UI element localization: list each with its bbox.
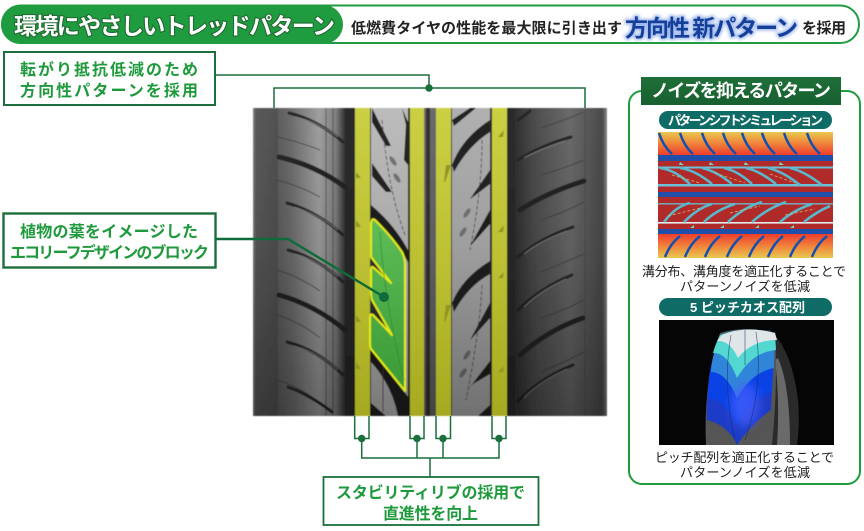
connector: leaf <box>216 239 388 301</box>
stability ribs <box>355 108 507 416</box>
left shoulder <box>253 108 345 416</box>
tire tread <box>253 108 607 416</box>
centre block grooves right <box>452 108 490 416</box>
callout: stability rib: スタビリティリブの採用で <box>336 483 525 502</box>
header subtitle: 低燃費タイヤの性能を最大限に引き出す <box>351 19 622 37</box>
caption: simulation <box>642 264 846 294</box>
panel title <box>641 77 841 105</box>
callout: eco leaf: エコリーフデザインのブロック <box>10 243 209 262</box>
callout: stability rib: 直進性を向上 <box>383 504 478 523</box>
callout: eco leaf <box>4 214 216 268</box>
panel: noise reduction <box>629 77 860 484</box>
vertical shading <box>253 108 607 416</box>
callout: rolling resistance <box>4 52 215 105</box>
header subtitle <box>351 15 846 41</box>
caption: pitch chaos: ピッチ配列を適正化することで <box>655 450 834 465</box>
connector: directional pattern <box>215 75 585 108</box>
tire visualisation <box>659 320 834 445</box>
centre base <box>345 108 515 416</box>
callout: stability rib <box>324 477 538 525</box>
connector: ribs <box>355 416 506 477</box>
callout: rolling resistance: 転がり抵抗低減のため <box>20 60 198 79</box>
shoulder slots right <box>518 111 584 401</box>
pill: 5 pitch chaos: 5 ピッチカオス配列 <box>690 300 805 315</box>
panel title: ノイズを抑えるパターン <box>651 80 831 101</box>
header subtitle: 方向性 新パターン <box>625 15 798 41</box>
pill: pattern shift simulation: パターンシフトシミュレーション <box>668 113 823 128</box>
shoulder slots left <box>279 113 345 412</box>
eco leaf block <box>370 219 405 391</box>
header subtitle: を採用 <box>802 20 846 37</box>
caption: pitch chaos <box>655 450 834 480</box>
header subtitle: 方向性 新パターン <box>625 15 798 41</box>
callout: eco leaf: 植物の葉をイメージした <box>20 222 198 241</box>
colour bands <box>707 329 775 445</box>
simulation chart <box>658 132 833 258</box>
caption: simulation: パターンノイズを低減 <box>680 279 810 294</box>
pill: 5 pitch chaos <box>659 298 832 316</box>
centre block grooves left <box>371 108 409 416</box>
callout: rolling resistance: 方向性パターンを採用 <box>20 81 198 100</box>
header title pill: 環境にやさしいトレッドパターン <box>14 13 335 39</box>
right shoulder <box>515 108 607 416</box>
shoulder lines <box>277 108 585 416</box>
caption: pitch chaos: パターンノイズを低減 <box>680 465 810 480</box>
caption: simulation: 溝分布、溝角度を適正化することで <box>642 264 846 279</box>
centre blocks <box>371 108 408 416</box>
header bar <box>1 5 859 44</box>
header title pill <box>1 5 343 44</box>
header title pill: 環境にやさしいトレッドパターン <box>14 13 335 39</box>
centre block fine lines <box>382 120 482 412</box>
